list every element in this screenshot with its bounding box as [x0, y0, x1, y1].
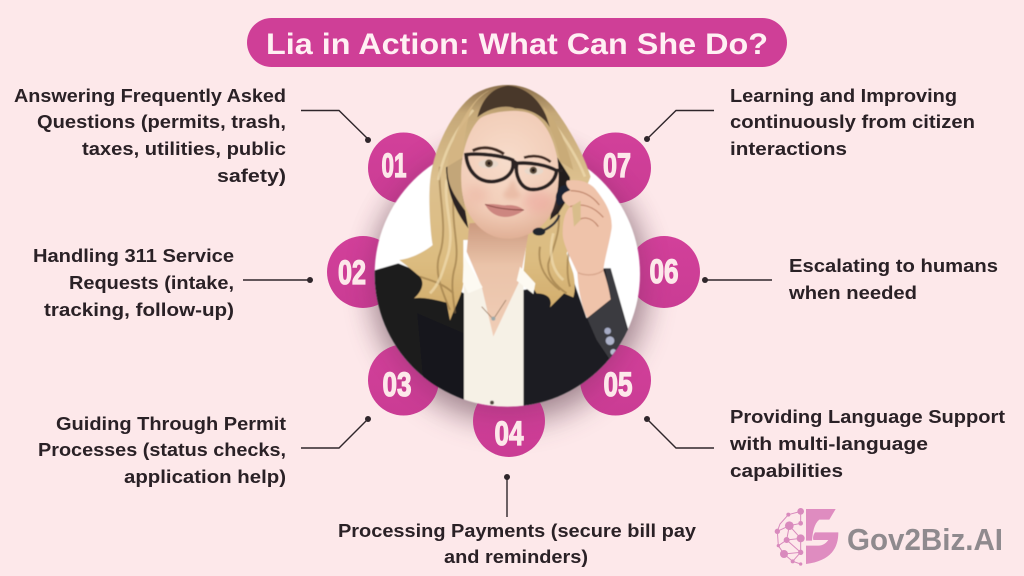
necklace	[482, 300, 506, 319]
text: item 07: continuously from citizen	[730, 112, 975, 132]
number 01: 01	[382, 147, 406, 185]
dark under-hair	[446, 157, 468, 228]
number 03: 03	[382, 366, 412, 404]
text: item 01: Questions (permits, trash,	[37, 112, 286, 132]
text: item 04: Processing Payments (secure bill pay	[338, 521, 696, 541]
text: item 01: safety)	[217, 166, 286, 186]
inner shadow on badges	[374, 144, 642, 412]
connector 03	[301, 416, 371, 448]
text: item 05: with multi-language	[729, 434, 928, 454]
shirt	[464, 283, 524, 407]
badge 02	[327, 236, 399, 308]
badge 07	[580, 132, 651, 204]
badge 01	[368, 132, 439, 204]
face	[461, 111, 559, 239]
text: item 07: interactions	[730, 139, 847, 159]
connector 02	[243, 277, 313, 283]
text: item 06: Escalating to humans	[789, 256, 998, 276]
text: item 02	[33, 246, 234, 320]
badge numbers	[338, 147, 678, 453]
eyes	[478, 160, 498, 168]
glasses	[466, 154, 563, 189]
text: item 07	[730, 86, 975, 159]
number 04: 04	[494, 415, 524, 453]
text: item 06	[788, 256, 998, 303]
badge 03	[368, 344, 439, 416]
nose	[503, 180, 520, 199]
text: item 03: Processes (status checks,	[38, 440, 286, 460]
text: item 02: tracking, follow-up)	[44, 300, 234, 320]
text: item 01	[14, 86, 286, 186]
connector 06	[702, 277, 772, 283]
sleeve buttons	[604, 328, 611, 334]
headset	[533, 185, 571, 236]
circle shadow	[372, 148, 648, 424]
connector 05	[644, 416, 714, 448]
text: item 01: taxes, utilities, public	[82, 139, 286, 159]
badge 06	[628, 236, 700, 308]
text: item 07: Learning and Improving	[730, 86, 957, 106]
text: item 05	[729, 407, 1005, 481]
hand	[562, 180, 612, 318]
connector 07	[644, 110, 714, 142]
logo mark	[775, 508, 838, 566]
text: item 03: Guiding Through Permit	[56, 414, 286, 434]
connector 04	[504, 474, 510, 517]
number 06: 06	[650, 253, 678, 291]
number 02: 02	[338, 254, 366, 292]
text: item 04: and reminders)	[444, 547, 588, 567]
text: item 05: Providing Language Support	[730, 407, 1005, 427]
hair top	[447, 86, 507, 212]
title	[247, 18, 787, 67]
number 07: 07	[603, 147, 631, 185]
logo wordmark: Gov2Biz.AI	[847, 522, 1003, 557]
sleeve	[587, 268, 627, 361]
badge 05	[580, 344, 651, 416]
number 05: 05	[604, 366, 632, 404]
text: item 01: Answering Frequently Asked	[14, 86, 286, 106]
title: Lia in Action: What Can She Do?	[266, 28, 768, 61]
text: item 05: capabilities	[730, 461, 843, 481]
hair lock near fingers	[572, 201, 581, 227]
connector 01	[301, 110, 371, 143]
text: item 04	[338, 521, 696, 567]
badge 04	[473, 385, 545, 457]
eyebrows	[473, 148, 504, 154]
neck	[467, 218, 531, 337]
jacket	[373, 263, 464, 410]
hair strands	[420, 167, 570, 313]
cheek blush	[523, 190, 553, 213]
text: item 03: application help)	[124, 467, 286, 487]
number badges	[327, 132, 700, 457]
hair back	[399, 85, 591, 321]
text: item 02: Handling 311 Service	[33, 246, 234, 266]
collar	[463, 256, 483, 293]
text: item 03	[38, 414, 286, 487]
mouth	[485, 204, 524, 217]
text: item 02: Requests (intake,	[69, 273, 234, 293]
text: item 06: when needed	[788, 283, 917, 303]
logo: Gov2Biz.AI	[775, 508, 1003, 566]
portrait of Lia in circle	[373, 85, 640, 410]
